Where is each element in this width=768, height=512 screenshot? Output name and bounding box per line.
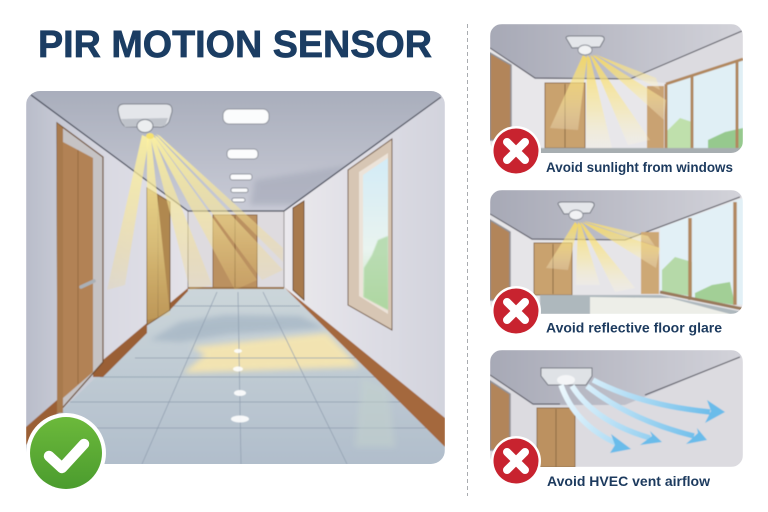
ceiling shadow [250,165,350,205]
back double door [213,215,257,288]
arrowheads [610,400,725,453]
icon: red X badge 1 [491,126,541,176]
back wall [188,211,284,288]
window reflection [357,401,393,444]
back door [537,408,575,467]
floor tile lines [60,292,428,464]
middle left door [147,188,170,325]
caption: glare: Avoid reflective floor glare [546,320,722,336]
second door [647,86,664,148]
back door [545,83,585,148]
right window [348,139,392,330]
caption: sunlight: Avoid sunlight from windows [546,160,733,175]
icon: red X badge 3 [491,436,541,486]
back baseboard [188,287,284,289]
panel: avoid floor glare [490,190,743,314]
floor lamp reflections [231,349,249,422]
panel: correct hallway placement [20,88,448,470]
ceiling lines [31,95,441,211]
side door [641,232,659,294]
left door [490,381,510,450]
ceiling lights [223,109,269,202]
airflow arrows [561,380,710,444]
near left door [57,123,103,413]
door handle [81,281,94,287]
vent [541,368,592,385]
windows [668,61,742,148]
floor [20,288,445,470]
panel: avoid HVAC airflow [490,350,743,467]
floor light patch [183,333,360,373]
beams [550,55,587,130]
beams [546,222,578,270]
right baseboard [284,287,445,447]
left baseboards [26,288,188,445]
ceiling [490,190,743,240]
ceiling [30,91,442,182]
sensor beams [107,134,283,320]
icon: red X badge 2 [491,286,541,336]
caption: airflow (reads "HVEC" in the reference): Avoid HVEC vent airflow [547,474,711,489]
panel: avoid sunlight [490,24,743,154]
left door [490,220,510,300]
ceiling [490,24,743,79]
sensor [566,36,604,48]
floor shadow [150,315,325,342]
far right door [293,201,304,300]
floor [540,295,743,314]
PIR sensor [118,104,172,139]
windows [660,198,743,305]
icon: green check badge [26,413,106,493]
sensor [558,202,594,214]
back door [534,243,572,295]
floor [540,148,743,154]
right wall [284,93,445,418]
ceiling [490,350,743,405]
title: PIR MOTION SENSOR [38,24,432,66]
dashed divider [466,24,468,496]
left wall [26,92,188,433]
left door [490,53,511,140]
